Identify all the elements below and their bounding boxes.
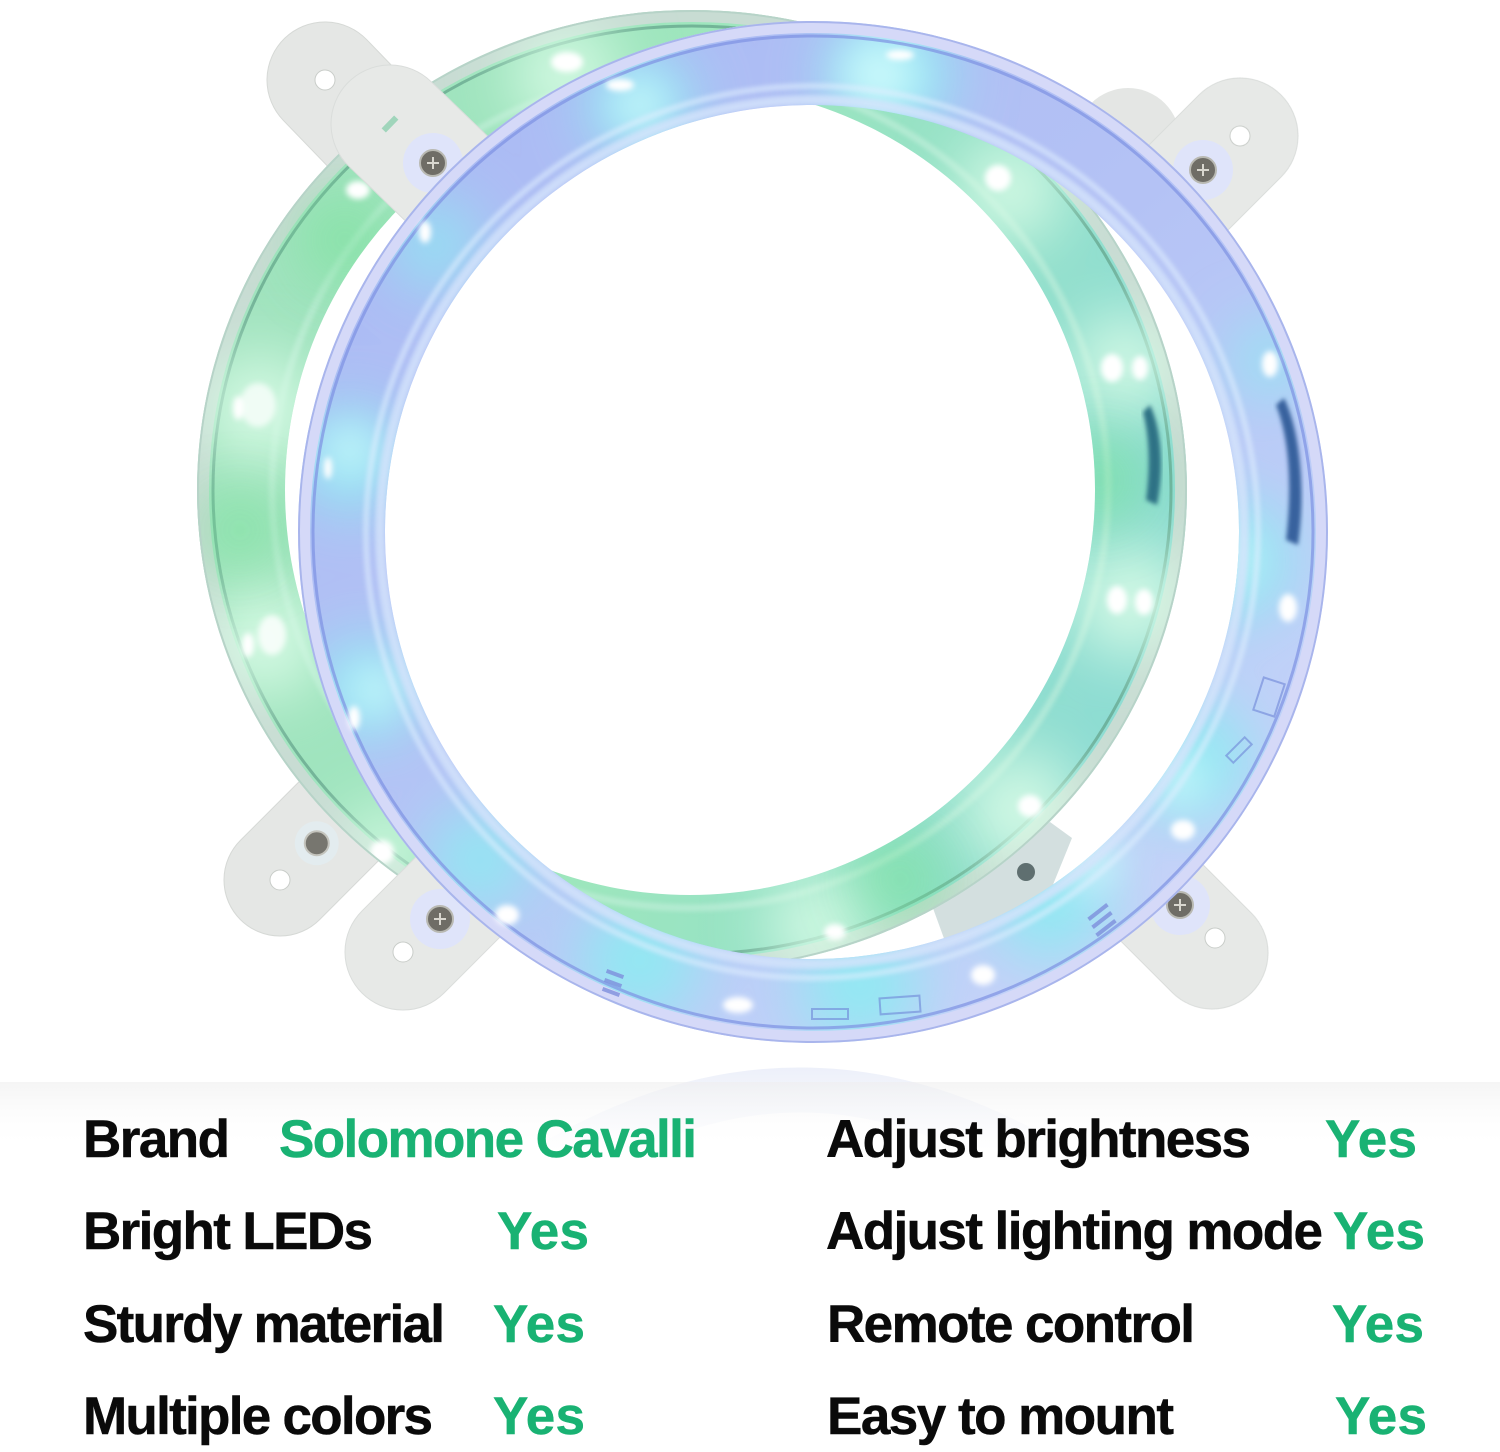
front bracket: blue ring bottom left bbox=[321, 837, 518, 1034]
back bracket: green ring top left bbox=[243, 0, 443, 199]
label: Remote control: Remote control bbox=[827, 1295, 1195, 1354]
spec table: left column bbox=[83, 1110, 697, 1446]
back bracket: green ring bottom right bbox=[930, 822, 1072, 955]
value: Yes: Yes bbox=[493, 1295, 585, 1354]
value: Yes: Yes bbox=[493, 1387, 585, 1446]
label: Sturdy material: Sturdy material bbox=[83, 1295, 445, 1354]
reflection strip under the rings bbox=[0, 1068, 1500, 1150]
value: Yes: Yes bbox=[1325, 1110, 1417, 1169]
label: Multiple colors: Multiple colors bbox=[83, 1387, 433, 1446]
label: Bright LEDs: Bright LEDs bbox=[83, 1202, 373, 1261]
value: Yes: Yes bbox=[497, 1202, 589, 1261]
value: Solomone Cavalli: Solomone Cavalli bbox=[279, 1110, 697, 1169]
value: Yes: Yes bbox=[1335, 1387, 1427, 1446]
front bracket: blue ring bottom right bbox=[1098, 839, 1291, 1032]
back bracket: green ring top right bbox=[1076, 88, 1180, 200]
front bracket: blue ring top left bbox=[307, 41, 507, 239]
green LED ring bbox=[190, 0, 1200, 980]
spec table: right column bbox=[826, 1110, 1427, 1446]
value: Yes: Yes bbox=[1332, 1295, 1424, 1354]
bracket screw mounts bbox=[403, 133, 1233, 949]
value: Yes: Yes bbox=[1333, 1202, 1425, 1261]
label: Brand: Brand bbox=[83, 1110, 230, 1169]
label: Easy to mount: Easy to mount bbox=[827, 1387, 1174, 1446]
blue LED ring bbox=[290, 10, 1340, 1050]
back bracket: green ring bottom left bbox=[201, 777, 383, 959]
label: Adjust lighting mode: Adjust lighting mode bbox=[826, 1202, 1323, 1261]
label: Adjust brightness: Adjust brightness bbox=[826, 1110, 1251, 1169]
front bracket: blue ring top right bbox=[1125, 54, 1322, 251]
